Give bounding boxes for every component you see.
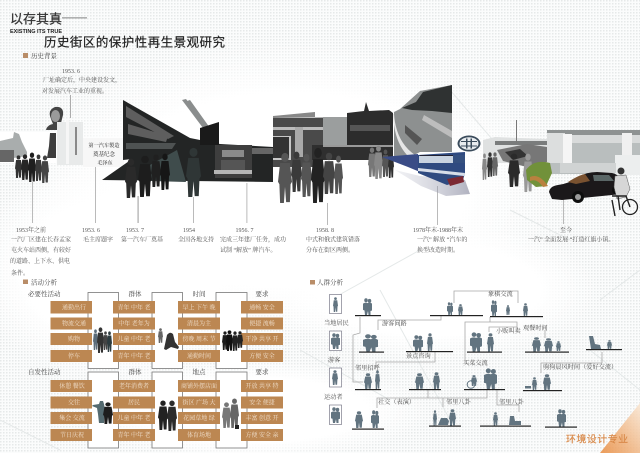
timeline text: 1978-1988 [413,226,467,254]
orange box labels: 方便 安全 亲 [245,431,279,439]
crowd diagram labels: 观餐时间 [523,324,548,332]
timeline text: today: 一汽” 全面发展 “打造红旗小镇。 [528,236,614,244]
orange box labels: 物流交通 [62,320,86,328]
crowd diagram labels: 小贩叫卖 [496,327,522,335]
orange box labels: 便捷 流畅 [249,320,275,328]
photo: calligraphy scroll: 毛泽东 [97,160,113,166]
connector lines [353,291,602,412]
orange box labels: 花园草地 绿 [183,414,215,422]
photo: calligraphy scroll: 第一汽车製造 [88,141,120,149]
timeline text: before 1953: 条件。 [11,269,29,277]
activity headings: 自发性活动 [28,367,61,376]
orange box labels: 早上 下午 晚 [182,304,216,312]
orange box labels: 休憩 餐饮 [59,382,85,390]
timeline text: 1978-1988: 一汽” 解放 “汽车的 [417,236,467,244]
footer label: environmental design: 环境设计专业 [566,432,628,446]
orange boxes [50,301,283,441]
English subtitle: EXISTING ITS TRUE [10,29,62,35]
timeline text: 1958.8 [306,228,360,254]
title rule [62,16,87,19]
activity headings: 必要性活动 [28,289,61,298]
legend icons: crowd types [324,294,349,424]
crowd silhouettes row 3 [355,368,562,391]
crowd diagram labels: 邻里招呼 [355,364,381,372]
orange box labels: 停车 [68,352,80,360]
section heading: activity analysis [23,278,58,286]
photo: calligraphy scroll: 奠基纪念 [93,150,115,158]
timeline text: 1956.7: 完成三年建厂任务，成功 [220,236,286,244]
timeline text: 1958.8: 分布在街区两侧。 [306,246,354,254]
legend: group [330,405,342,424]
orange box labels: 方便 安全 [249,352,275,360]
timeline text: 1954: 全国各地支持 [178,236,214,244]
logo: FAW emblem [458,136,480,152]
orange box labels: 开放 共享 特 [245,382,279,390]
section heading: crowd analysis [310,278,344,286]
orange box labels: 傍晚 周末 节 [182,335,216,343]
orange box labels: 干净 共享 开 [245,335,279,343]
section heading: history [23,51,58,60]
orange box labels: 青年 中年 老 [117,431,151,439]
timeline text: 1956.7 [220,228,286,254]
orange box labels: 商铺外摆店面 [181,382,217,390]
timeline text: 1956.7: 1956. 7 [236,228,254,234]
photo: modern town [482,120,640,192]
timeline text: 1954: 1954 [183,228,195,234]
corner wedge [600,403,640,453]
photo collage: 1953 before [0,132,56,183]
crowd diagram labels: 景点咨询 [406,352,431,360]
crowd diagram labels: 邻里八卦 [446,398,472,406]
crowd diagram labels: 游客问路 [382,320,408,328]
timeline text: 1953.7: 第一汽车厂奠基 [121,236,163,244]
orange box labels [59,304,279,439]
crowd diagram labels: 买菜交流 [463,359,488,367]
timeline connectors [32,166,564,225]
activity headings: 要求 [256,289,269,298]
timeline text: 1958.8: 1958. 8 [316,228,334,234]
photo: calligraphy scroll [57,120,124,167]
legend: athletes: 运动者 [324,393,343,401]
orange box labels: 中年 老年为 [118,320,150,328]
orange box labels: 交往 [68,398,80,406]
title: existing its true: 以存其真 [10,12,62,26]
section heading: crowd analysis: 人群分析 [317,278,344,286]
note 1953.6 [42,69,121,118]
orange box labels: 节日庆祝 [60,431,84,439]
orange box labels: 老年消费者 [119,382,149,390]
photo: crane and construction [102,99,273,198]
note 1953.6: 1953. 6 [62,69,80,75]
orange box labels: 购物 [68,335,80,343]
timeline text: 1953.6: 1953. 6 [82,228,100,234]
photo: cyclist [612,168,638,216]
legend: local residents: 当地居民 [324,319,349,327]
activity headings: 时间 [192,289,206,298]
orange box labels: 通勤时间 [187,352,211,360]
orange box labels: 安全 便捷 [249,398,275,406]
orange box labels: 体育场地 [187,431,211,439]
note 1953.6: 对发展汽车工业的重视。 [42,87,108,95]
timeline text: 1956.7: 试制 “解放” 牌汽车。 [220,246,276,254]
activity headings: 群体 [128,367,142,376]
orange box labels: 通勤出行 [62,304,86,312]
crowd silhouettes row 2 [359,332,622,353]
orange box labels: 儿童 中年 老 [117,335,151,343]
crowd diagram labels [355,290,617,406]
timeline text: 1953.7 [121,228,163,244]
photo: Mao portrait [46,107,69,130]
timeline text: 1978-1988: 换型改造时期。 [417,246,459,254]
timeline text: before 1953: 屯火车站西侧，有较好 [11,246,71,254]
crowd diagram labels: 象棋交流 [488,290,513,298]
activity photo figures [92,327,243,431]
note 1953.6: 厂址确定后，中央建设发文， [43,76,121,84]
people group: 1958 [278,146,394,203]
timeline text: 1958.8: 中式和俄式建筑错落 [306,236,360,244]
crowd diagram labels: 社交（表演） [378,398,415,406]
orange box labels: 街区 广场 大 [182,398,216,406]
orange box labels: 儿童 中年 老 [117,414,151,422]
orange box labels: 居民 [128,398,140,406]
crowd diagram labels: 驹狗晨风时间（爱好交流） [543,363,617,371]
main heading: 历史街区的保护性再生景观研究 [44,34,225,50]
timeline text: 1953.6 [82,228,113,244]
timeline text: before 1953 [10,226,71,277]
orange box labels: 通畅 安全 [249,304,275,312]
timeline text: 1953.6: 毛主席题字 [83,236,113,244]
timeline text: before 1953: 的道路、上下水、供电 [10,257,70,265]
timeline text: today: 至今 [560,226,572,234]
photo: factory buildings [273,102,393,167]
section heading: history: 历史背景 [31,51,58,60]
legend: tourists: 游客 [328,356,340,364]
activity headings [28,289,269,376]
orange box labels: 青年 中年 老 [117,352,151,360]
crowd diagram labels: 邻里八卦 [499,398,525,406]
activity headings: 地点 [192,367,206,376]
orange box labels: 集会 交流 [59,414,85,422]
section heading: activity analysis: 活动分析 [31,278,58,286]
activity frames [88,292,247,448]
timeline text: 1954 [178,228,214,244]
photo: railway landscape [393,85,452,157]
timeline text: 1978-1988: 1978年末-1988年末 [413,226,463,234]
timeline text: today [528,226,614,244]
timeline text: before 1953: 一汽厂区建在长春孟家 [11,236,71,244]
photo: red flag sedan [549,172,625,203]
activity headings: 要求 [256,367,269,376]
activity headings: 群体 [128,289,142,298]
crowd silhouettes row 4 [352,409,577,430]
orange box labels: 清晨为主 [187,320,211,328]
orange box labels: 青年 中年 老 [117,304,151,312]
orange box labels: 丰富 创意 开 [245,414,279,422]
crowd silhouettes row 1 [355,298,543,317]
timeline text: 1953.7: 1953. 7 [126,228,144,234]
photo: blue train [382,152,470,196]
timeline text: before 1953: 1953年之前 [16,226,46,234]
title block [10,12,225,50]
